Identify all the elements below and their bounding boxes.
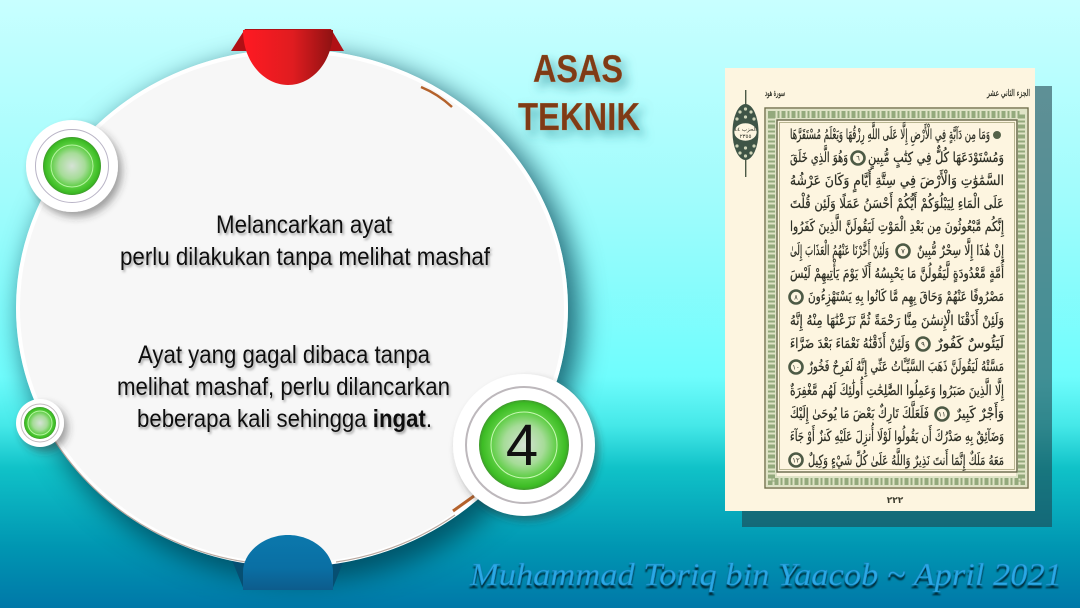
page shadow (742, 86, 1052, 527)
Arabic text lines: مَسَّتْهُ لَيَقُولَنَّ ذَهَبَ السَّيِّـَٔاتُ عَنِّي إِنَّهُ لَفَرِحٌ فَخُورٌ (807, 358, 1004, 377)
Arabic text lines: وَلَئِنْ أَخَّرْنَا عَنْهُمُ الْعَذَابَ إِلَىٰ (790, 239, 889, 261)
Arabic text lines: وَأَجْرٌ كَبِيرٌ (954, 402, 1004, 422)
Arabic text lines: إِنَّكُم مَّبْعُوثُونَ مِن بَعْدِ الْمَوْتِ لَيَقُولَنَّ الَّذِينَ كَفَرُوا (790, 214, 1004, 237)
badge: number 4: 4 (506, 413, 538, 478)
text block: second paragraph (117, 341, 450, 433)
Arabic text lines: عَلَى الْمَاءِ لِيَبْلُوَكُمْ أَيُّكُمْ أَحْسَنُ عَمَلًا وَلَئِن قُلْتَ (790, 192, 1004, 212)
verse numbers: ١٠ (792, 364, 800, 372)
Arabic text lines: إِنْ هَٰذَا إِلَّا سِحْرٌ مُّبِينٌ (917, 238, 1004, 261)
text block: second paragraph: Ayat yang gagal dibaca tanpa (138, 341, 430, 369)
verse numbers: ١١ (938, 410, 946, 418)
red tab wings (231, 29, 344, 51)
text block: second paragraph: beberapa kali sehingga ingat. (137, 405, 432, 433)
page headers (765, 89, 1030, 99)
title: ASAS (533, 48, 623, 91)
verse markers (790, 131, 1001, 466)
verse numbers: ٨ (794, 294, 798, 302)
page number: ٢٢٢ (887, 496, 904, 506)
accent arc: top right (421, 87, 452, 107)
text block: second paragraph: melihat mashaf, perlu dilancarkan (117, 373, 450, 401)
page headers: الجزء الثاني عشر (986, 89, 1030, 99)
Arabic text lines: وَمُسْتَوْدَعَهَا كُلٌّ فِي كِتَٰبٍ مُّبِينٍ (868, 145, 1004, 170)
Arabic text lines (790, 122, 1005, 471)
Arabic text lines: السَّمَٰوَٰتِ وَالْأَرْضَ فِي سِتَّةِ أَيَّامٍ وَكَانَ عَرْشُهُ (790, 169, 1004, 193)
title: TEKNIK (518, 96, 640, 139)
Arabic text lines: وَضَآئِقٌ بِهِ صَدْرُكَ أَن يَقُولُوا لَوْلَا أُنزِلَ عَلَيْهِ كَنزٌ أَوْ جَآءَ (790, 423, 1004, 446)
Arabic text lines: وَهُوَ الَّذِي خَلَقَ (790, 145, 848, 166)
Arabic text lines: لَيَئُوسٌ كَفُورٌ (935, 335, 1005, 352)
Arabic text lines: فَلَعَلَّكَ تَارِكٌ بَعْضَ مَا يُوحَىٰ إِلَيْكَ (790, 401, 929, 424)
icon: side medallion: الحزب ٤٤ (734, 127, 757, 133)
Arabic text lines: أُمَّةٍ مَّعْدُودَةٍ لَّيَقُولُنَّ مَا يَحْبِسُهُ أَلَا يَوْمَ يَأْتِيهِمْ لَيْسَ (790, 259, 1004, 284)
author signature: Muhammad Toriq bin Yaacob ~ April 2021 (469, 556, 1062, 592)
verse numbers: ٦ (856, 154, 860, 162)
badge: number 4 (453, 374, 595, 516)
Arabic text lines: مَصْرُوفًا عَنْهُمْ وَحَاقَ بِهِم مَّا كَانُوا بِهِ يَسْتَهْزِءُونَ (808, 288, 1004, 307)
Arabic text lines: إِلَّا الَّذِينَ صَبَرُوا وَعَمِلُوا الصَّٰلِحَٰتِ أُولَٰئِكَ لَهُم مَّغْفِرَةٌ (790, 377, 1004, 401)
panel: large white circle (18, 51, 566, 565)
icon: side medallion: ٢٣٥٥ (740, 134, 751, 140)
page frame with ornamental border (765, 108, 1028, 488)
panel: Quran page (725, 68, 1035, 511)
text block: first paragraph: Melancarkan ayat (216, 211, 392, 239)
verse numbers: ٧ (901, 248, 905, 256)
circle drop shadow (16, 49, 568, 567)
title (518, 48, 640, 139)
accent arc: bottom right (453, 496, 474, 511)
verse numbers (792, 154, 946, 464)
Arabic text lines: وَلَئِنْ أَذَقْنَٰهُ نَعْمَاءَ بَعْدَ ضَرَّاءَ (790, 332, 910, 352)
tab: red top dome (243, 30, 333, 85)
text block: first paragraph: perlu dilakukan tanpa melihat mashaf (120, 243, 490, 271)
badge: lower green dot (16, 399, 64, 447)
Arabic text lines: وَلَئِنْ أَذَقْنَا الْإِنسَٰنَ مِنَّا رَحْمَةً ثُمَّ نَزَعْنَٰهَا مِنْهُ إِنَّهُ (790, 309, 1004, 331)
text block: first paragraph (120, 211, 490, 271)
page headers: سورة هود (765, 89, 785, 99)
badge: upper green dot (26, 120, 118, 212)
icon: side medallion (732, 90, 758, 177)
blue tab wings (232, 560, 344, 590)
verse numbers: ٩ (921, 340, 925, 348)
verse numbers: ١٢ (792, 456, 800, 464)
Arabic text lines: مَعَهُ مَلَكٌ إِنَّمَا أَنتَ نَذِيرٌ وَاللَّهُ عَلَىٰ كُلِّ شَيْءٍ وَكِيلٌ (808, 448, 1004, 471)
tab: blue bottom dome (243, 535, 333, 590)
